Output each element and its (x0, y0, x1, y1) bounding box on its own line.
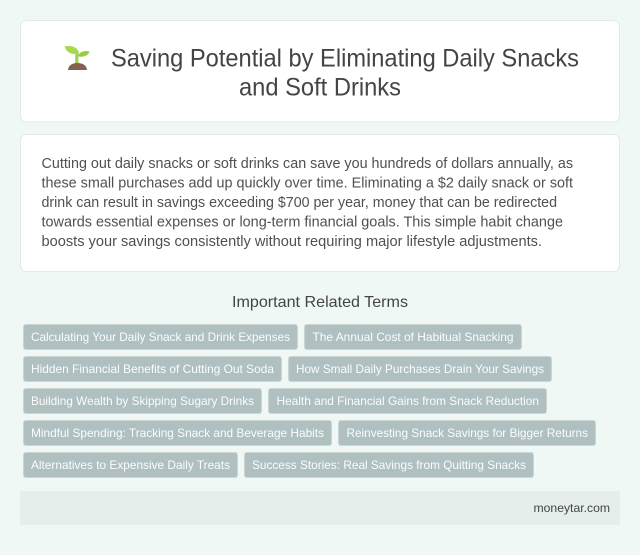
tag: Alternatives to Expensive Daily Treats (31, 458, 230, 472)
tag: Reinvesting Snack Savings for Bigger Returns (346, 426, 588, 440)
tag (288, 356, 552, 382)
tag (24, 388, 262, 414)
panel: header (20, 20, 620, 122)
tag: Hidden Financial Benefits of Cutting Out Soda (31, 362, 274, 376)
title: and Soft Drinks (239, 74, 401, 102)
icon: sprout (64, 46, 90, 70)
tag: Success Stories: Real Savings from Quitting Snacks (252, 458, 526, 472)
tag (24, 452, 238, 478)
tag: Building Wealth by Skipping Sugary Drinks (31, 394, 254, 408)
tag (24, 324, 298, 350)
summary text: Cutting out daily snacks or soft drinks can save you hundreds of dollars annually, as (42, 156, 573, 172)
panel: summary (20, 134, 620, 272)
title (111, 44, 579, 102)
summary text: drink can result in savings exceeding $700 per year, money that can be redirected (42, 195, 557, 211)
heading: related terms: Important Related Terms (232, 294, 408, 311)
title: Saving Potential by Eliminating Daily Snacks (111, 44, 579, 72)
tag (244, 452, 534, 478)
summary text: towards essential expenses or long-term financial goals. This simple habit change (42, 214, 563, 230)
footer: moneytar.com (534, 501, 610, 515)
summary text (42, 156, 573, 250)
summary text: these small purchases add up quickly over time. Eliminating a $2 daily snack or soft (42, 176, 573, 192)
tag: Mindful Spending: Tracking Snack and Beverage Habits (31, 426, 324, 440)
tag: The Annual Cost of Habitual Snacking (312, 330, 514, 344)
tag: Health and Financial Gains from Snack Reduction (276, 394, 539, 408)
tag (304, 324, 522, 350)
summary text: boosts your savings consistently without requiring major lifestyle adjustments. (42, 234, 542, 250)
tag list (24, 324, 596, 478)
tag: Calculating Your Daily Snack and Drink Expenses (31, 330, 290, 344)
tag (338, 420, 596, 446)
tag (24, 356, 282, 382)
footer (20, 491, 620, 525)
tag (24, 420, 332, 446)
tag (268, 388, 546, 414)
tag: How Small Daily Purchases Drain Your Savings (296, 362, 544, 376)
